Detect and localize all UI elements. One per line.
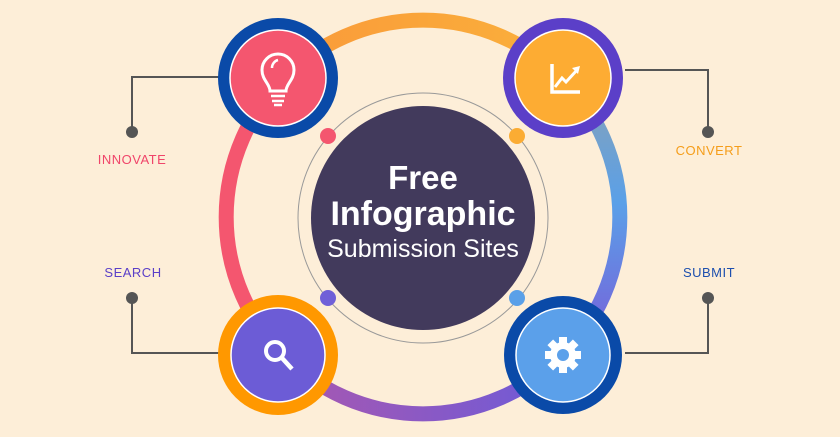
connector lines (132, 70, 708, 353)
icon: chart (503, 18, 623, 138)
icon: search (218, 295, 338, 415)
label: submit: SUBMIT (683, 265, 735, 280)
center circle title: Submission Sites (327, 235, 519, 263)
label: search: SEARCH (104, 265, 162, 280)
small dots (320, 128, 525, 306)
label: convert: CONVERT (676, 143, 742, 158)
label: innovate: INNOVATE (98, 152, 166, 167)
outer ring (226, 20, 620, 414)
inner thin circle (298, 93, 548, 343)
center circle title: Infographic (330, 195, 516, 233)
icon: gear (504, 296, 622, 414)
center circle title: Free (388, 159, 458, 196)
center circle title (311, 106, 535, 330)
icon: lightbulb (218, 18, 338, 138)
